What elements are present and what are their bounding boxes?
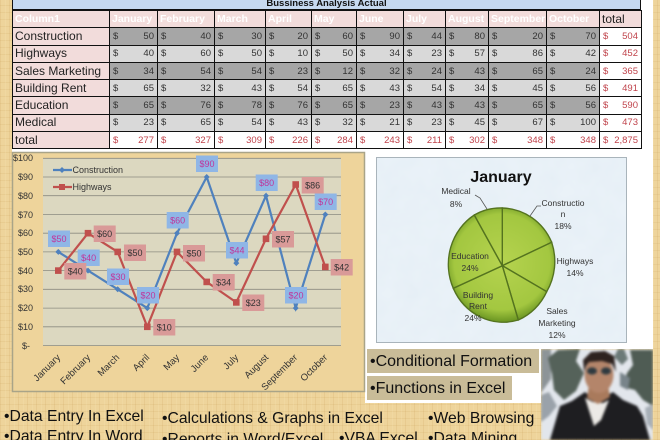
data table: $ xyxy=(360,117,365,128)
data table: June xyxy=(359,13,384,25)
x axis labels: May xyxy=(162,352,182,373)
jacket xyxy=(550,392,650,440)
data table: 43 xyxy=(251,83,262,94)
data table: $ xyxy=(449,135,454,146)
data table: May xyxy=(314,13,334,25)
data table: 473 xyxy=(622,117,638,128)
data table: $ xyxy=(315,31,320,42)
data table: $ xyxy=(269,135,274,146)
data table: 277 xyxy=(138,135,154,146)
data table: $ xyxy=(315,135,320,146)
data table: $ xyxy=(269,100,274,111)
data table: October xyxy=(549,13,589,25)
highways data labels xyxy=(64,177,353,336)
data table: 65 xyxy=(200,117,211,128)
data table: January xyxy=(112,13,152,25)
data table: $ xyxy=(550,100,555,111)
x axis labels: January xyxy=(31,352,63,384)
data table: $ xyxy=(113,83,118,94)
data table: $ xyxy=(113,66,118,77)
skills list: column three xyxy=(428,410,534,440)
data table: $ xyxy=(113,48,118,59)
data table: $ xyxy=(360,66,365,77)
pie labels: 14% xyxy=(566,268,584,278)
data table: 78 xyxy=(251,100,262,111)
data table xyxy=(12,10,642,149)
data table: $ xyxy=(315,83,320,94)
data table: 54 xyxy=(431,83,442,94)
data table: 56 xyxy=(585,83,596,94)
data table: $ xyxy=(218,135,223,146)
data table: April xyxy=(268,13,292,25)
data table: 90 xyxy=(389,31,400,42)
data table: 10 xyxy=(297,48,308,59)
data table: 211 xyxy=(427,135,442,146)
skill box: conditional formation: •Conditional Formation xyxy=(370,353,532,370)
data table: $ xyxy=(603,66,608,77)
pie slices xyxy=(448,208,555,322)
data table: 20 xyxy=(297,31,308,42)
data table: 302 xyxy=(469,135,485,146)
data table: 43 xyxy=(389,83,400,94)
data table: $ xyxy=(603,48,608,59)
data table: 43 xyxy=(474,100,485,111)
pie labels: 24% xyxy=(464,313,482,323)
data table: $ xyxy=(315,117,320,128)
skills list: column two xyxy=(162,410,418,440)
pie labels: Medical xyxy=(441,186,471,196)
y axis labels: $90 xyxy=(18,172,33,182)
skill box: conditional formation xyxy=(367,349,539,373)
highways data labels: $50 xyxy=(127,248,143,258)
data table: 43 xyxy=(474,66,485,77)
data table: $ xyxy=(550,66,555,77)
data table: $ xyxy=(603,135,608,146)
data table: 2,875 xyxy=(614,135,638,146)
chart panel background xyxy=(12,152,364,392)
data table: $ xyxy=(269,117,274,128)
series: construction line xyxy=(55,174,328,311)
y axis labels: $80 xyxy=(18,191,33,201)
data table: $ xyxy=(360,31,365,42)
data table: $ xyxy=(218,31,223,42)
table: business analysis actual xyxy=(12,0,642,149)
data table: total xyxy=(15,133,38,147)
line chart: construction vs highways xyxy=(12,152,653,440)
data table: $ xyxy=(449,31,454,42)
y axis labels: $20 xyxy=(18,303,33,313)
x axis labels xyxy=(31,352,330,393)
x axis labels: April xyxy=(131,352,152,374)
data table: 76 xyxy=(297,100,308,111)
data table: 504 xyxy=(622,31,638,42)
data table: Education xyxy=(15,98,68,112)
y axis labels: $50 xyxy=(18,247,33,257)
data table: February xyxy=(160,13,205,25)
construction data labels: $80 xyxy=(259,178,274,188)
x axis labels: March xyxy=(96,352,122,379)
data table: 65 xyxy=(532,66,543,77)
data table: Sales Marketing xyxy=(15,64,101,78)
construction data labels: $20 xyxy=(140,290,156,300)
data table: 23 xyxy=(297,66,308,77)
data table: $ xyxy=(269,83,274,94)
data table: 45 xyxy=(474,117,485,128)
data table: 65 xyxy=(143,83,154,94)
data table: 57 xyxy=(474,48,485,59)
data table: $ xyxy=(407,100,412,111)
data table: 21 xyxy=(389,117,400,128)
data table: September xyxy=(491,13,545,25)
data table: $ xyxy=(603,117,608,128)
hair xyxy=(583,351,616,372)
data table: 32 xyxy=(200,83,211,94)
data table: $ xyxy=(492,66,497,77)
data table: $ xyxy=(218,66,223,77)
data table: Building Rent xyxy=(15,81,86,95)
data table: $ xyxy=(407,31,412,42)
pie chart panel xyxy=(376,158,626,342)
skills list: column one xyxy=(4,408,144,440)
plot area xyxy=(43,158,341,346)
construction data labels xyxy=(48,156,337,304)
data table: 327 xyxy=(195,135,211,146)
chart legend xyxy=(53,165,123,192)
data table: $ xyxy=(360,48,365,59)
highways data labels: $23 xyxy=(246,298,261,308)
pie leader lines xyxy=(475,195,541,216)
pie labels: 8% xyxy=(450,199,463,209)
data table: 50 xyxy=(342,48,353,59)
data table: $ xyxy=(550,48,555,59)
data table: $ xyxy=(407,66,412,77)
data table: $ xyxy=(161,48,166,59)
data table: 65 xyxy=(143,100,154,111)
y axis labels: $10 xyxy=(18,322,33,332)
data table: $ xyxy=(407,48,412,59)
data table: $ xyxy=(315,48,320,59)
data table: $ xyxy=(269,66,274,77)
data table: 23 xyxy=(431,117,442,128)
data table: total xyxy=(602,12,625,26)
data table: $ xyxy=(315,100,320,111)
data table: 67 xyxy=(532,117,543,128)
data table: 44 xyxy=(431,31,442,42)
construction data labels: $50 xyxy=(51,234,67,244)
skill: calculations and graphs: •Calculations & Graphs in Excel xyxy=(162,410,383,427)
data table: 43 xyxy=(431,100,442,111)
data table: $ xyxy=(315,66,320,77)
data table: $ xyxy=(492,31,497,42)
highways data labels: $57 xyxy=(275,234,291,244)
data table: $ xyxy=(449,83,454,94)
data table: $ xyxy=(449,100,454,111)
skill box: functions in excel xyxy=(367,376,512,400)
data table: 24 xyxy=(585,66,596,77)
table title bar xyxy=(12,0,641,10)
data table: $ xyxy=(550,117,555,128)
data table: 32 xyxy=(342,117,353,128)
data table: $ xyxy=(113,117,118,128)
data table: 491 xyxy=(622,83,638,94)
construction data labels: $20 xyxy=(288,290,304,300)
data table: 32 xyxy=(389,66,400,77)
data table: $ xyxy=(492,117,497,128)
data table: $ xyxy=(449,117,454,128)
data table: 70 xyxy=(585,31,596,42)
data table: 34 xyxy=(143,66,154,77)
data table: 226 xyxy=(292,135,308,146)
data table: 40 xyxy=(200,31,211,42)
data table: $ xyxy=(360,135,365,146)
data table: $ xyxy=(550,135,555,146)
data table: $ xyxy=(269,48,274,59)
data table: $ xyxy=(492,100,497,111)
data table: $ xyxy=(449,66,454,77)
skill: web browsing: •Web Browsing xyxy=(428,410,534,427)
data table: $ xyxy=(603,100,608,111)
data table: 348 xyxy=(580,135,596,146)
construction data labels: $70 xyxy=(318,197,333,207)
data table: Column1 xyxy=(15,13,60,25)
white backing panel: pie area xyxy=(365,152,653,349)
pie labels: 24% xyxy=(461,263,479,273)
data table: $ xyxy=(113,135,118,146)
pie labels: Sales xyxy=(546,306,568,316)
data table: $ xyxy=(407,83,412,94)
data table: $ xyxy=(161,83,166,94)
data table: $ xyxy=(492,48,497,59)
data table: 60 xyxy=(342,31,353,42)
highways data labels: $34 xyxy=(216,278,231,288)
data table: $ xyxy=(218,83,223,94)
y axis labels: $70 xyxy=(18,210,33,220)
x axis labels: August xyxy=(242,352,271,381)
data table: 80 xyxy=(474,31,485,42)
data table: 54 xyxy=(200,66,211,77)
y axis labels: $30 xyxy=(18,284,33,294)
data table: $ xyxy=(218,100,223,111)
data table: 50 xyxy=(143,31,154,42)
y axis labels: $100 xyxy=(13,153,33,163)
data table: $ xyxy=(407,135,412,146)
highways data labels: $40 xyxy=(68,266,83,276)
data table: $ xyxy=(218,48,223,59)
construction data labels: $44 xyxy=(229,246,245,256)
data table: $ xyxy=(218,117,223,128)
data table: $ xyxy=(550,31,555,42)
chart legend: Highways xyxy=(72,182,112,192)
sunglasses xyxy=(587,367,597,375)
data table: 45 xyxy=(532,83,543,94)
data table: Medical xyxy=(15,115,56,129)
data table: Highways xyxy=(15,46,67,60)
data table: $ xyxy=(603,83,608,94)
data table: 56 xyxy=(585,100,596,111)
x axis labels: October xyxy=(298,352,330,384)
data table: 348 xyxy=(527,135,543,146)
highways data labels: $86 xyxy=(305,180,320,190)
white backing panel: skills boxes xyxy=(365,349,541,403)
data table: 86 xyxy=(532,48,543,59)
pie labels: 12% xyxy=(548,330,566,340)
y axis labels: $- xyxy=(22,341,30,351)
x axis labels: February xyxy=(58,352,93,387)
pie labels: Marketing xyxy=(538,318,576,328)
data table: $ xyxy=(161,66,166,77)
data table: $ xyxy=(113,100,118,111)
pie title: January xyxy=(470,169,532,186)
data table: 23 xyxy=(431,48,442,59)
data table: 65 xyxy=(532,100,543,111)
skill: data entry in excel: •Data Entry In Excel xyxy=(4,408,144,425)
skill box: functions in excel: •Functions in Excel xyxy=(370,380,505,397)
data table: 76 xyxy=(200,100,211,111)
data table: $ xyxy=(161,135,166,146)
chart legend: Construction xyxy=(72,165,123,175)
highways data labels: $10 xyxy=(157,322,172,332)
data table: July xyxy=(406,13,427,25)
construction data labels: $90 xyxy=(199,159,215,169)
data table: $ xyxy=(161,100,166,111)
data table: 590 xyxy=(622,100,638,111)
y axis labels: $40 xyxy=(18,266,33,276)
data table: 24 xyxy=(431,66,442,77)
data table: $ xyxy=(449,48,454,59)
data table: $ xyxy=(269,31,274,42)
data table: 50 xyxy=(251,48,262,59)
data table: 65 xyxy=(342,100,353,111)
data table: 34 xyxy=(474,83,485,94)
data table: 65 xyxy=(342,83,353,94)
x axis labels: September xyxy=(259,352,300,393)
data table: $ xyxy=(161,31,166,42)
highways data labels: $60 xyxy=(97,229,112,239)
photo: man in snowy landscape xyxy=(541,349,653,440)
pie labels xyxy=(441,186,593,340)
data table: $ xyxy=(360,100,365,111)
data table: 54 xyxy=(251,66,262,77)
construction data labels: $60 xyxy=(170,216,185,226)
pie labels: n xyxy=(561,209,566,219)
data table: 20 xyxy=(532,31,543,42)
data table: 54 xyxy=(297,83,308,94)
pie labels: Rent xyxy=(469,301,488,311)
data table: $ xyxy=(161,117,166,128)
data table: August xyxy=(448,13,484,25)
data table: 12 xyxy=(342,66,353,77)
highways data labels: $50 xyxy=(186,248,202,258)
data table: 243 xyxy=(384,135,400,146)
data table: 54 xyxy=(251,117,262,128)
data table: $ xyxy=(550,83,555,94)
data table: 365 xyxy=(622,66,638,77)
data table: $ xyxy=(492,135,497,146)
construction data labels: $40 xyxy=(81,253,96,263)
data table: 34 xyxy=(389,48,400,59)
data table: 309 xyxy=(246,135,262,146)
data table: 42 xyxy=(585,48,596,59)
data table: Construction xyxy=(15,29,82,43)
data table: $ xyxy=(113,31,118,42)
data table: 284 xyxy=(337,135,353,146)
x axis labels: June xyxy=(189,352,211,375)
data table: 60 xyxy=(200,48,211,59)
pie labels: Education xyxy=(451,251,489,261)
white backing panel: top xyxy=(12,0,653,152)
shirt xyxy=(585,398,609,426)
pie labels: Constructio xyxy=(542,198,585,208)
data table: 23 xyxy=(389,100,400,111)
data table: 23 xyxy=(143,117,154,128)
pie labels: 18% xyxy=(554,221,572,231)
data table: 43 xyxy=(297,117,308,128)
data table: 452 xyxy=(622,48,638,59)
data table: $ xyxy=(492,83,497,94)
x axis labels: July xyxy=(221,352,241,372)
highways data labels: $42 xyxy=(334,262,349,272)
pie labels: Highways xyxy=(557,256,593,266)
neck xyxy=(587,385,610,404)
data table: $ xyxy=(407,117,412,128)
data table: $ xyxy=(360,83,365,94)
construction data labels: $30 xyxy=(110,272,126,282)
pie labels: Building xyxy=(463,290,493,300)
data table: 100 xyxy=(580,117,596,128)
data table: March xyxy=(217,13,248,25)
data table: 40 xyxy=(143,48,154,59)
data table: $ xyxy=(603,31,608,42)
series: highways line xyxy=(55,181,329,330)
y axis labels xyxy=(13,153,33,351)
face xyxy=(584,357,614,393)
data table: 30 xyxy=(251,31,262,42)
y axis labels: $60 xyxy=(18,228,33,238)
